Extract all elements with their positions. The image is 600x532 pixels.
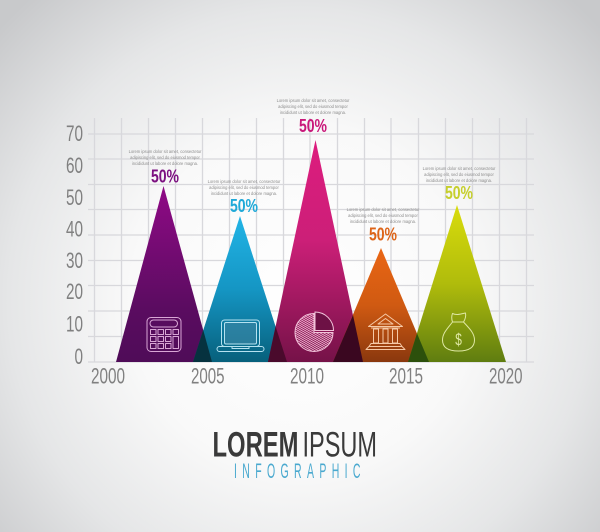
text block: purple: Lorem ipsum dolor sit amet, consectetur xyxy=(129,149,202,154)
x axis labels: 2010 xyxy=(290,364,324,388)
y axis labels: 30 xyxy=(66,248,83,273)
icon: money bag xyxy=(442,313,474,351)
value: purple 50%: 50% xyxy=(151,166,179,186)
text block: purple: incididunt ut labore et dolore magna. xyxy=(132,161,198,166)
x axis labels: 2015 xyxy=(389,364,423,388)
y axis labels xyxy=(66,121,83,369)
triangle: orange xyxy=(333,248,429,362)
icon: bank xyxy=(366,314,405,350)
text block: green: incididunt ut labore et dolore magna. xyxy=(426,178,492,183)
value: pink 50%: 50% xyxy=(299,116,327,136)
x axis labels xyxy=(91,364,522,388)
text block: pink: adipiscing elit, sed do eiusmod tempor xyxy=(278,104,348,109)
y axis labels: 20 xyxy=(66,279,83,304)
text block: pink: incididunt ut labore et dolore magna. xyxy=(280,110,346,115)
x axis labels: 2005 xyxy=(191,364,224,388)
overlap: orange and green xyxy=(408,333,429,362)
icon: pie chart xyxy=(295,312,334,352)
text block: purple xyxy=(129,149,202,166)
icon: money bag: $ xyxy=(455,331,462,350)
x axis labels: 2020 xyxy=(489,364,522,388)
text block: green: Lorem ipsum dolor sit amet, consectetur xyxy=(423,166,496,171)
value: blue 50%: 50% xyxy=(230,196,258,216)
text block: blue: adipiscing elit, sed do eiusmod tempor xyxy=(209,185,279,190)
text block: orange: adipiscing elit, sed do eiusmod tempor xyxy=(348,213,418,218)
text block: blue xyxy=(208,179,281,196)
y axis labels: 50 xyxy=(66,185,83,210)
icon: laptop xyxy=(217,320,264,352)
text block: orange xyxy=(347,207,420,224)
subtitle: INFOGRAPHIC xyxy=(234,459,361,483)
y axis labels: 0 xyxy=(74,344,83,369)
text block: green xyxy=(423,166,496,183)
text block: orange: Lorem ipsum dolor sit amet, consectetur xyxy=(347,207,420,212)
value: green 50%: 50% xyxy=(445,183,473,203)
triangle: green xyxy=(408,205,506,362)
text block: purple: adipiscing elit, sed do eiusmod tempor xyxy=(130,155,200,160)
y axis labels: 40 xyxy=(66,216,83,242)
title: IPSUM xyxy=(302,424,377,464)
triangle: pink xyxy=(268,140,363,362)
text block: blue: incididunt ut labore et dolore magna. xyxy=(211,191,277,196)
chart grid xyxy=(88,118,534,362)
triangle: blue xyxy=(193,216,287,362)
text block: pink: Lorem ipsum dolor sit amet, consectetur xyxy=(277,98,350,103)
overlap: purple and blue xyxy=(193,330,212,362)
value: orange 50%: 50% xyxy=(369,224,397,244)
y axis labels: 70 xyxy=(66,121,83,146)
icon: calculator xyxy=(147,318,181,352)
text block: blue: Lorem ipsum dolor sit amet, consectetur xyxy=(208,179,281,184)
text block: green: adipiscing elit, sed do eiusmod tempor xyxy=(424,172,494,177)
y axis labels: 10 xyxy=(66,312,83,336)
overlap: blue and pink xyxy=(268,326,287,362)
overlap: pink and orange xyxy=(333,315,363,362)
text block: orange: incididunt ut labore et dolore magna. xyxy=(350,219,416,224)
triangle: purple xyxy=(116,186,212,362)
title: LOREM xyxy=(212,424,298,464)
y axis labels: 60 xyxy=(66,153,83,178)
text block: pink xyxy=(277,98,350,115)
x axis labels: 2000 xyxy=(91,364,125,388)
